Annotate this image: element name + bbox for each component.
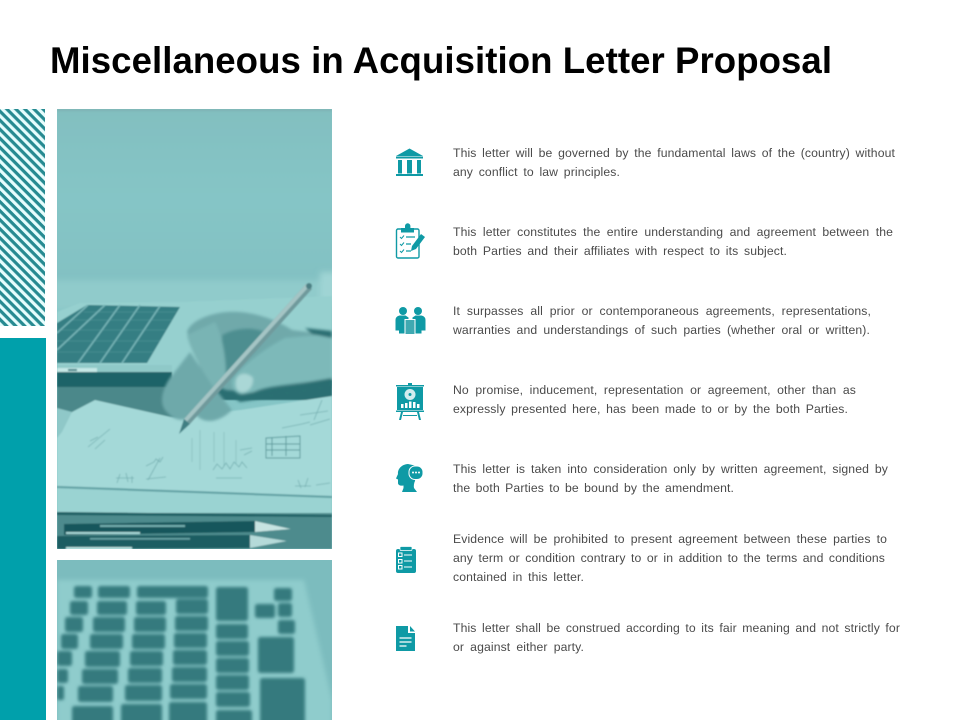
- pencil: [184, 284, 312, 424]
- icon: two people with a document: [396, 307, 426, 334]
- photo: hand writing on paper beside a laptop: [57, 109, 332, 549]
- text block 1: This letter will be governed by the fundamental laws of the (country) without: [453, 146, 895, 160]
- blurred desk background: [40, 272, 350, 310]
- text block 4: expressly presented here, has been made to or by the both Parties.: [453, 402, 848, 416]
- icon: checklist clipboard: [396, 546, 416, 573]
- text block 1: [453, 146, 895, 179]
- text block 7: This letter shall be construed according to its fair meaning and not strictly for: [453, 621, 900, 635]
- pens on the desk: [57, 513, 332, 549]
- photo: close-up of a computer keyboard: [57, 560, 332, 720]
- laptop keyboard: [57, 305, 180, 363]
- text block 4: [453, 383, 856, 416]
- text block 2: This letter constitutes the entire understanding and agreement between the: [453, 225, 893, 239]
- icon: clipboard with checklist and pencil: [396, 223, 425, 259]
- handwriting: [88, 400, 330, 488]
- laptop body: [57, 296, 332, 400]
- text block 6: Evidence will be prohibited to present agreement between these parties to: [453, 532, 887, 546]
- text block 6: contained in this letter.: [453, 570, 584, 584]
- text block 4: No promise, inducement, representation or agreement, other than as: [453, 383, 856, 397]
- icon: document page: [396, 626, 415, 651]
- icon: bank building: [396, 148, 423, 176]
- icon: presentation easel: [396, 383, 424, 420]
- text block 3: [453, 304, 871, 337]
- text block 5: the both Parties to be bound by the amendment.: [453, 481, 734, 495]
- text block 5: [453, 462, 888, 495]
- text block 6: any term or condition contrary to or in addition to the terms and conditions: [453, 551, 885, 565]
- laptop front edge and desk: [57, 365, 172, 373]
- paper stack: [57, 396, 332, 500]
- text block 1: any conflict to law principles.: [453, 165, 620, 179]
- title: Miscellaneous in Acquisition Letter Proposal: [50, 40, 832, 81]
- text block 7: or against either party.: [453, 640, 584, 654]
- icon: head with speech bubble: [396, 464, 422, 492]
- striped decorative block: [0, 109, 45, 326]
- text block 3: It surpasses all prior or contemporaneous agreements, representations,: [453, 304, 871, 318]
- hand holding pencil: [162, 312, 332, 421]
- text block 2: [453, 225, 893, 258]
- text block 3: warranties and understandings of such parties (whether oral or written).: [453, 323, 870, 337]
- text block 6: [453, 532, 887, 584]
- text block 7: [453, 621, 900, 654]
- text block 2: both Parties and their affiliates with respect to its subject.: [453, 244, 787, 258]
- solid teal bar: [0, 338, 46, 720]
- text block 5: This letter is taken into consideration only by written agreement, signed by: [453, 462, 888, 476]
